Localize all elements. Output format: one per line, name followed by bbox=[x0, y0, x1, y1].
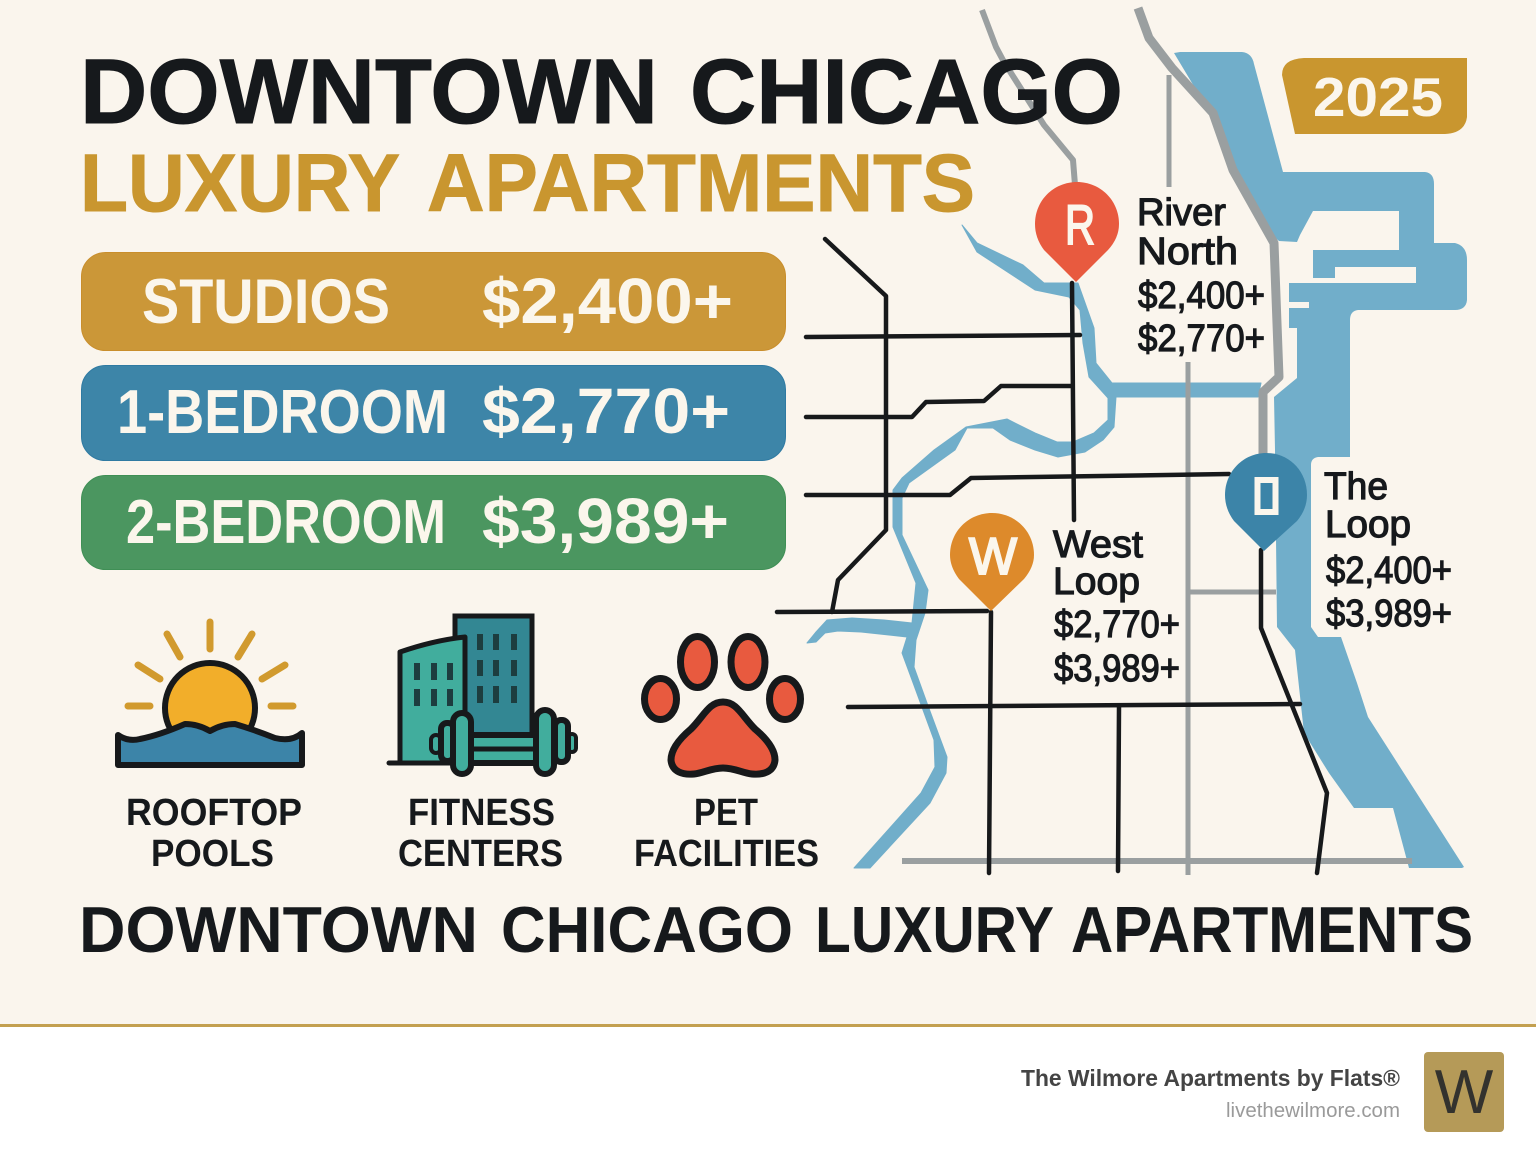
label: west loop prices: $3,989+ bbox=[1054, 648, 1180, 690]
label: rooftop pools bbox=[126, 792, 302, 875]
label: fitness centers bbox=[398, 792, 563, 875]
footer url: livethewilmore.com bbox=[1226, 1100, 1400, 1122]
label: the loop prices: The bbox=[1324, 466, 1388, 508]
pin: west loop: W bbox=[969, 528, 1017, 586]
pin: the loop bbox=[1225, 453, 1307, 551]
bottom headline: LUXURY bbox=[815, 893, 1054, 966]
label: rooftop pools: POOLS bbox=[151, 833, 274, 875]
bottom headline bbox=[79, 893, 1473, 966]
label: west loop prices bbox=[1053, 524, 1180, 690]
bottom headline: APARTMENTS bbox=[1071, 893, 1473, 966]
footer logo bbox=[1424, 1052, 1504, 1132]
chicago river bbox=[807, 225, 1261, 868]
price bar: 1-bedroom: $2,770+ bbox=[482, 375, 730, 447]
city map bbox=[777, 8, 1467, 875]
bottom headline: DOWNTOWN bbox=[79, 893, 478, 966]
bottom headline: CHICAGO bbox=[501, 893, 793, 966]
label: fitness centers: CENTERS bbox=[398, 833, 563, 875]
icon: rooftop pool sunset bbox=[118, 622, 302, 765]
label: west loop prices: $2,770+ bbox=[1054, 604, 1180, 646]
footer brand name: The Wilmore Apartments by Flats® bbox=[1021, 1065, 1400, 1091]
subtitle: luxury apartments: APARTMENTS bbox=[427, 138, 975, 229]
label: rooftop pools: ROOFTOP bbox=[126, 792, 302, 834]
title: downtown chicago bbox=[80, 41, 1123, 143]
gray roads bbox=[902, 8, 1412, 875]
price bar: 2-bedroom bbox=[82, 476, 786, 570]
footer band bbox=[0, 1024, 1536, 1154]
title: downtown chicago: CHICAGO bbox=[690, 41, 1123, 143]
pin: west loop bbox=[950, 513, 1034, 611]
label: river north prices: $2,770+ bbox=[1138, 318, 1265, 360]
pin: river north: R bbox=[1065, 193, 1095, 256]
footer logo: W bbox=[1435, 1058, 1494, 1127]
label: river north prices: River bbox=[1137, 192, 1226, 234]
label: west loop prices: Loop bbox=[1053, 561, 1140, 603]
title: downtown chicago: DOWNTOWN bbox=[80, 41, 658, 143]
subtitle: luxury apartments: LUXURY bbox=[80, 138, 400, 229]
label: the loop prices: $3,989+ bbox=[1326, 593, 1452, 635]
label: river north prices bbox=[1137, 192, 1265, 360]
year badge: 2025 bbox=[1313, 66, 1443, 128]
label: pet facilities: FACILITIES bbox=[634, 833, 819, 875]
label: pet facilities bbox=[634, 792, 819, 875]
label: river north prices: $2,400+ bbox=[1138, 275, 1265, 317]
black streets bbox=[777, 239, 1327, 873]
price bar: 1-bedroom bbox=[82, 366, 786, 460]
price bar: studios: $2,400+ bbox=[482, 265, 733, 337]
price bar: 2-bedroom: $3,989+ bbox=[482, 485, 729, 557]
label: fitness centers: FITNESS bbox=[408, 792, 555, 834]
price bar: 1-bedroom: 1-BEDROOM bbox=[117, 378, 448, 447]
label: the loop prices bbox=[1324, 466, 1452, 635]
label: the loop prices: Loop bbox=[1325, 504, 1411, 546]
price bar: 2-bedroom: 2-BEDROOM bbox=[126, 488, 446, 557]
pin: river north bbox=[1035, 182, 1119, 282]
label: pet facilities: PET bbox=[694, 792, 758, 834]
subtitle: luxury apartments bbox=[80, 138, 975, 229]
year badge bbox=[1282, 58, 1467, 134]
lake michigan bbox=[1174, 52, 1467, 868]
icon: paw print bbox=[644, 636, 800, 774]
label: west loop prices: West bbox=[1053, 524, 1143, 566]
price bar: studios: STUDIOS bbox=[142, 267, 390, 337]
label: river north prices: North bbox=[1137, 231, 1238, 273]
label: the loop prices: $2,400+ bbox=[1326, 550, 1452, 592]
icon: fitness building and dumbbell bbox=[389, 616, 576, 774]
price bar: studios bbox=[82, 252, 786, 350]
